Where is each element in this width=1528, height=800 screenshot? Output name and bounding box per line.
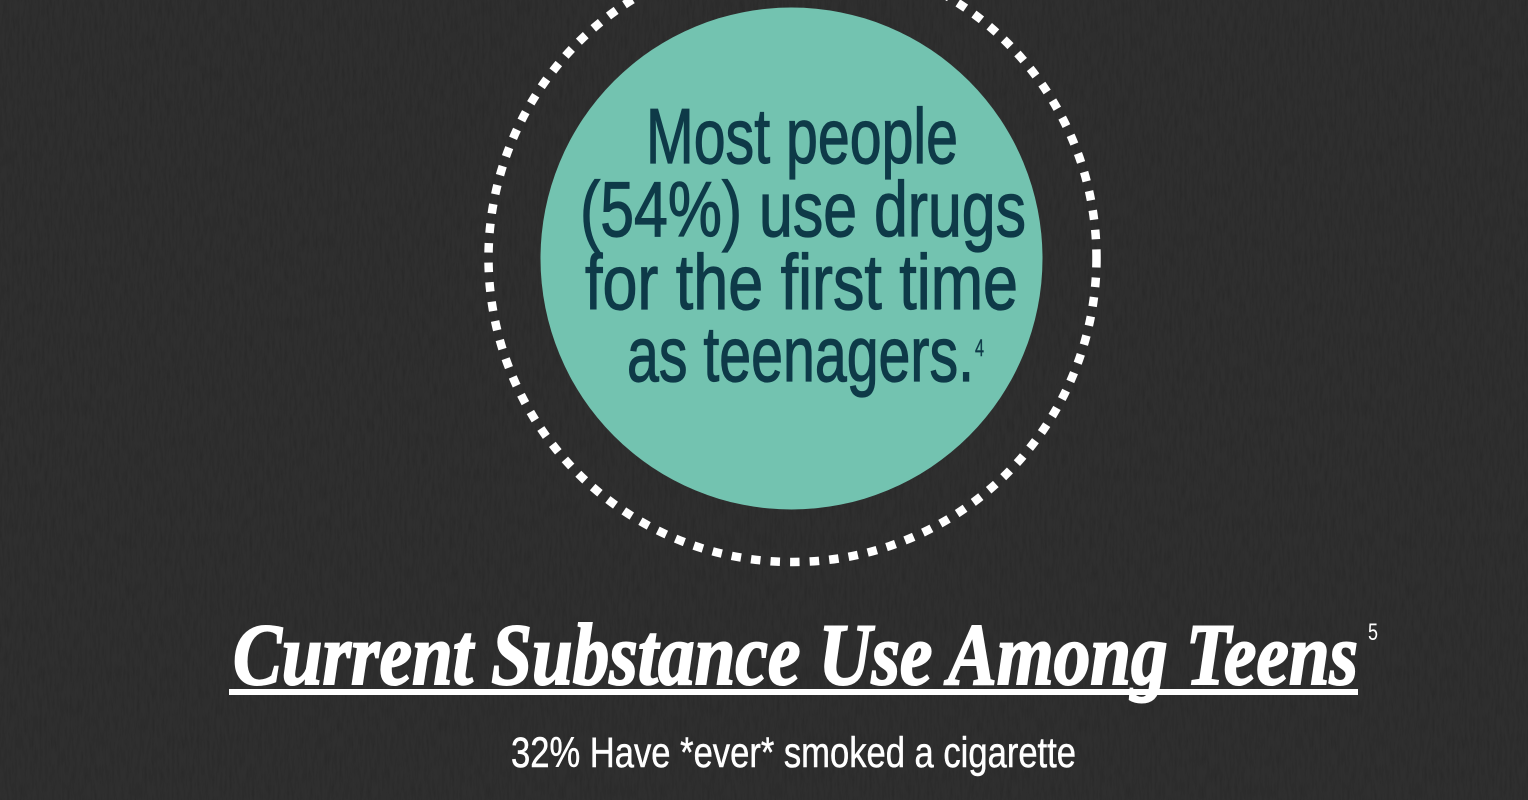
callout text: for the first time (585, 238, 1018, 326)
callout text: (54%) use drugs (580, 165, 1026, 253)
callout text: Most people (646, 92, 958, 180)
callout: teen drug use statistic (540, 8, 1042, 510)
teal circle (540, 8, 1042, 510)
statistic line: 32% Have *ever* smoked a cigarette (511, 729, 1076, 777)
callout text: 4 (975, 335, 984, 362)
callout text: as teenagers. (627, 310, 974, 398)
section heading: 5 (1368, 619, 1378, 646)
callout text (580, 92, 1026, 398)
dashed ring around callout (488, 0, 1096, 562)
